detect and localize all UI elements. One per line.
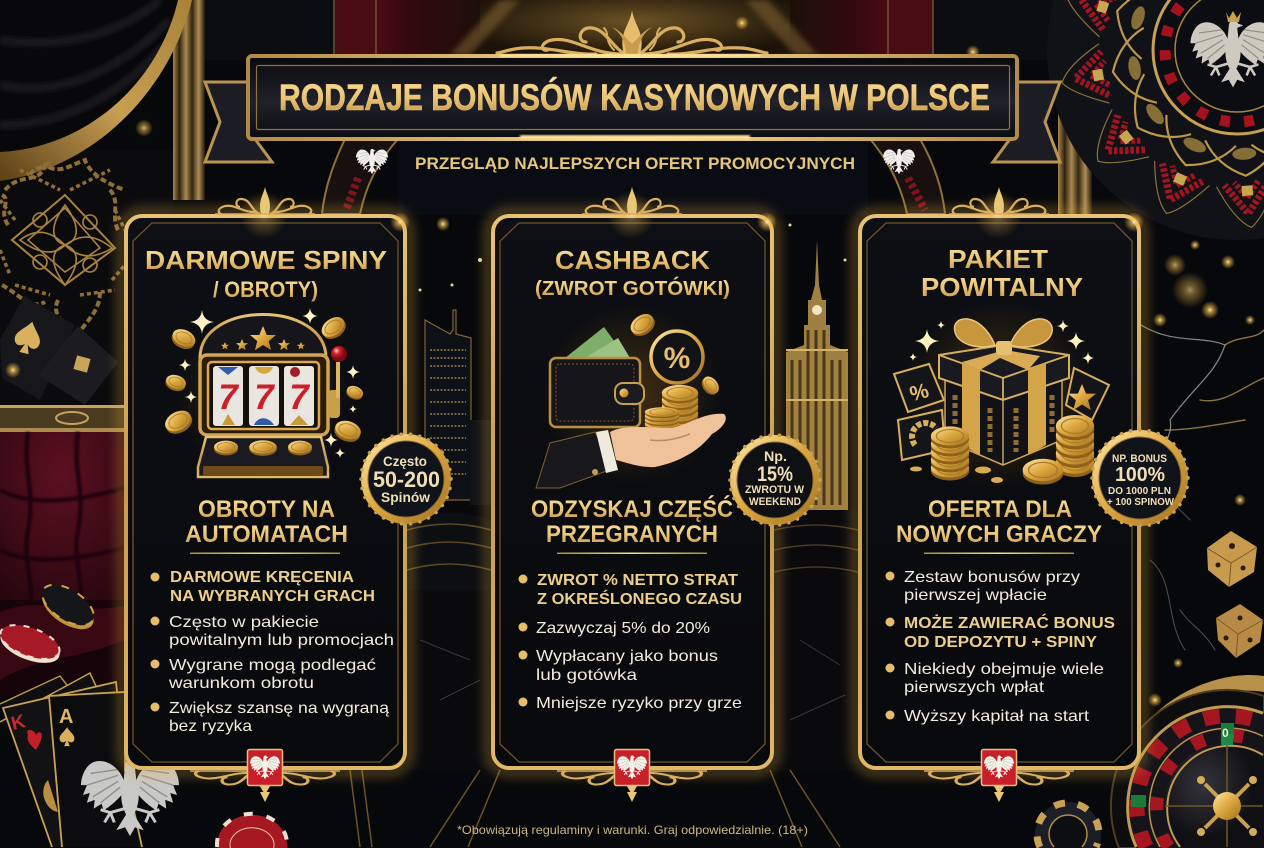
icon: slot machine: 7 [254,378,275,417]
badge: 15%: Np. [764,448,787,464]
bullet list: OD DEPOZYTU + SPINY [904,634,1097,651]
subheading second line: PRZEGRANYCH [546,521,718,548]
damask ornament [0,160,125,332]
gold picture frame rail [0,405,124,432]
black chip bottom right [1035,802,1101,848]
badge: 100% [1092,430,1188,526]
bullet list: Wyższy kapitał na start [904,708,1090,725]
panel: pakiet powitalny [856,187,1188,802]
badge: spins: Spinów [381,489,430,505]
red poker chip bottom [217,814,287,848]
subheading: OBROTY NA [198,496,335,523]
playing cards bottom left [0,673,142,847]
icon: left eagle [356,149,388,174]
left marble [0,150,173,410]
icon: slot machine: 7 [289,378,310,417]
badge: 100%: NP. BONUS [1112,453,1167,465]
subheading second line: AUTOMATACH [185,521,348,548]
bullet list: pierwszych wpłat [904,679,1045,696]
bullet list: bez ryzyka [169,718,252,735]
icon: wallet and hand: % [664,342,690,375]
bullet list: Często w pakiecie [169,614,319,631]
footer disclaimer: *Obowiązują regulaminy i warunki. Graj odpowiedzialnie. (18+) [457,823,808,837]
bullet list: pierwszej wpłacie [904,587,1047,604]
bullet list: ZWROT % NETTO STRAT [537,572,738,589]
left and right gold columns [173,0,1092,215]
top right roulette disc [1047,0,1264,240]
badge: 15%: 15% [757,463,793,486]
bullet list: DARMOWE KRĘCENIA [170,569,354,586]
panel: cashback [489,187,820,802]
heading second line: / OBROTY) [213,277,318,302]
black curtain with gold rim [0,0,192,181]
bullet list: MOŻE ZAWIERAĆ BONUS [904,613,1115,632]
right marble wall with veins [1141,325,1264,650]
right ribbon [993,82,1060,162]
subheading: OFERTA DLA [928,496,1072,523]
bullet list: Wygrane mogą podlegać [169,657,376,674]
heading: CASHBACK [555,245,710,275]
bullet list: Zestaw bonusów przy [904,569,1080,586]
title text: RODZAJE BONUSÓW KASYNOWYCH W POLSCE [279,76,990,118]
silver eagle bottom left [81,759,179,836]
playing cards bottom left: A [59,706,73,728]
heading: DARMOWE SPINY [145,245,387,275]
bullet list: Zazwyczaj 5% do 20% [536,620,710,637]
poker chips left [0,577,100,670]
badge: 15%: WEEKEND [749,496,801,508]
subtitle: PRZEGLĄD NAJLEPSZYCH OFERT PROMOCYJNYCH [415,154,855,173]
title banner [205,54,1060,162]
bullet list: NA WYBRANYCH GRACH [170,588,375,605]
heading second line: POWITALNY [921,272,1083,302]
top stage backdrop with curtains [205,0,1060,87]
bullet list [886,569,1115,725]
arches beside banner [322,139,945,214]
icon: gift box [894,300,1109,490]
badge: 100%: DO 1000 PLN [1108,485,1171,497]
icon: gift box: % [907,379,932,406]
bullet list: Mniejsze ryzyko przy grze [536,695,742,712]
black playing cards [0,296,118,405]
badge: 15%: ZWROTU W [745,484,805,496]
panel: darmowe spiny [122,187,451,802]
bullet list: Z OKREŚLONEGO CZASU [537,589,742,608]
bullet list: Niekiedy obejmuje wiele [904,661,1104,678]
Warsaw skyline tower [425,310,491,505]
steps and floor centre [350,510,858,847]
heading: PAKIET [948,244,1048,274]
bullet list: Zwiększ szansę na wygraną [169,700,389,717]
badge: spins [361,434,451,524]
badge: 15% [730,435,820,525]
icon: wallet and hand [536,305,726,488]
subheading: ODZYSKAJ CZĘŚĆ [531,495,733,523]
icon: slot machine [161,308,365,480]
dice [1207,531,1263,658]
badge: spins: Często [383,453,427,469]
badge: 100%: + 100 SPINOW [1107,496,1174,508]
centre backdrop under banner [398,139,868,215]
badge: spins: 50-200 [373,467,440,492]
playing cards bottom left: K [9,711,28,735]
bullet list: powitalnym lub promocjach [169,632,394,649]
Palace of Culture [786,240,848,510]
bottom-right roulette wheel: 0 [1222,726,1229,740]
subheading second line: NOWYCH GRACZY [896,521,1102,548]
bullet list: lub gotówka [536,667,637,684]
bullet list: warunkom obrotu [168,675,314,692]
badge: 100%: 100% [1115,464,1165,486]
title ornament crown [497,10,767,55]
icon: right eagle [883,149,915,174]
red velvet sofa [0,432,124,695]
icon: slot machine: 7 [218,378,239,417]
heading second line: (ZWROT GOTÓWKI) [535,276,730,300]
bullet list [518,572,742,712]
left ribbon [205,82,272,162]
bullet list [150,569,394,735]
bottom-right roulette wheel [1111,675,1264,848]
bullet list: Wypłacany jako bonus [536,648,718,665]
